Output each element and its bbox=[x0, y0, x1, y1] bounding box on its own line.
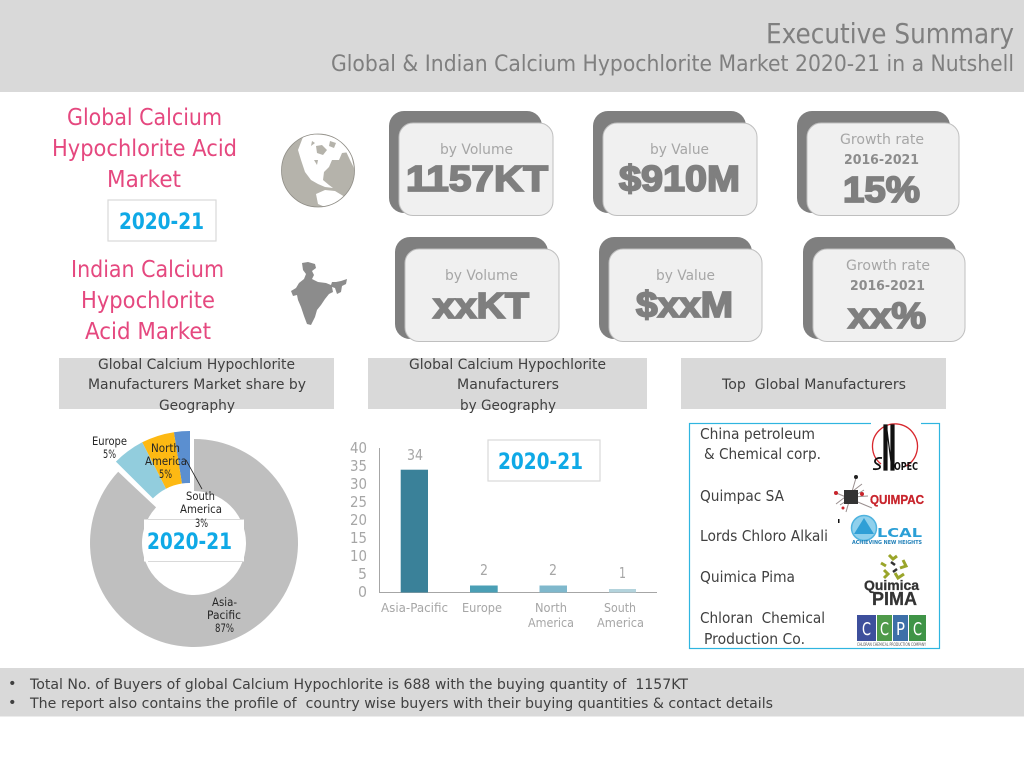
bar: Europe: 2 bbox=[480, 561, 488, 579]
stat card: india growth: Growth rate bbox=[846, 258, 930, 274]
y axis labels: 30 bbox=[350, 475, 367, 493]
heading: indian market: Hypochlorite bbox=[81, 286, 215, 314]
y axis labels: 15 bbox=[350, 529, 367, 547]
year badge: bar chart bbox=[488, 440, 600, 481]
year badge: global: 2020-21 bbox=[119, 210, 204, 235]
stat card: global value: by Value bbox=[650, 142, 709, 158]
footer bullet 2: The report also contains the profile of country wise buyers with their buying quantities & contact details bbox=[29, 696, 773, 712]
logo: LCAL: LCAL bbox=[877, 526, 922, 540]
section banner: market share bbox=[59, 357, 334, 414]
panel: top manufacturers bbox=[690, 421, 940, 648]
bar: South America: 1 bbox=[619, 564, 626, 582]
heading: global market: Market bbox=[107, 165, 181, 193]
footer bullet 1: Total No. of Buyers of global Calcium Hypochlorite is 688 with the buying quantity of 1157KT bbox=[29, 677, 688, 693]
y axis labels: 10 bbox=[350, 547, 367, 565]
section banner: manufacturers by geography bbox=[368, 357, 647, 414]
footer bullet 2: • bbox=[8, 695, 17, 711]
label: Europe bbox=[92, 434, 127, 461]
leader line bbox=[186, 460, 202, 489]
icon: india map bbox=[291, 262, 347, 325]
y axis labels: 5 bbox=[358, 565, 367, 583]
logo: CCPC: C bbox=[880, 619, 889, 640]
logo: CCPC: CHLORAN CHEMICAL PRODUCTION COMPANY bbox=[857, 642, 926, 647]
company names: Production Co. bbox=[704, 630, 805, 648]
bar: Asia-Pacific: 34 bbox=[407, 446, 423, 464]
y axis labels: 20 bbox=[350, 511, 367, 529]
category labels: Europe bbox=[462, 600, 502, 615]
company names: Chloran Chemical bbox=[700, 609, 825, 627]
logo: CCPC bbox=[857, 615, 926, 647]
slice: Europe bbox=[116, 442, 166, 498]
section banner: market share: Manufacturers Market share by bbox=[88, 377, 306, 393]
section banner: top manufacturers bbox=[681, 358, 946, 409]
logo: LCAL: ACHIEVING NEW HEIGHTS bbox=[852, 540, 922, 546]
label: South America: 3% bbox=[195, 516, 208, 530]
footer band bbox=[0, 668, 1024, 716]
stat card: india volume bbox=[395, 237, 559, 342]
stat card: global volume: 1157KT bbox=[406, 158, 548, 199]
logo: Sinopec bbox=[872, 424, 918, 473]
company names: Lords Chloro Alkali bbox=[700, 527, 828, 545]
logo: Quimica Pima: PIMA bbox=[872, 589, 917, 609]
icon: globe bbox=[282, 134, 354, 207]
logo: Quimica Pima: Quimica bbox=[864, 577, 919, 593]
section banner: market share: Geography bbox=[159, 398, 235, 414]
heading: indian market: Indian Calcium bbox=[71, 255, 224, 283]
section banner: top manufacturers: Top Global Manufacturers bbox=[721, 377, 906, 393]
year badge: global bbox=[108, 200, 216, 241]
y axis labels: 35 bbox=[350, 457, 367, 475]
year badge: donut: 2020-21 bbox=[147, 530, 232, 555]
stat card: global growth: Growth rate bbox=[840, 132, 924, 148]
heading: indian market: Acid Market bbox=[85, 317, 211, 345]
company names bbox=[700, 425, 828, 648]
category labels bbox=[381, 600, 644, 630]
logo: Quimica Pima bbox=[864, 555, 919, 609]
bar: Asia-Pacific bbox=[401, 446, 428, 592]
stat card: india value: by Value bbox=[656, 268, 715, 284]
slice: Asia-Pacific bbox=[90, 439, 298, 647]
year badge: donut bbox=[144, 520, 244, 562]
heading: indian market bbox=[71, 255, 224, 345]
y axis labels: 0 bbox=[358, 583, 367, 601]
stat card: india volume: by Volume bbox=[445, 268, 518, 284]
section banner: market share: Global Calcium Hypochlorite bbox=[98, 357, 295, 373]
stat card: global volume bbox=[389, 111, 553, 216]
label: South America bbox=[180, 489, 222, 530]
label: North America: America bbox=[145, 454, 187, 468]
footer bullet 1: • bbox=[8, 676, 17, 692]
stat card: india growth bbox=[803, 237, 965, 342]
label: Asia-Pacific bbox=[207, 595, 241, 635]
stat card: india value: $xxM bbox=[636, 284, 733, 325]
year badge: bar chart: 2020-21 bbox=[498, 450, 583, 475]
stat card: india growth: xx% bbox=[848, 295, 926, 336]
stat card: global value: $910M bbox=[619, 158, 740, 199]
stat card: india value bbox=[599, 237, 762, 342]
company names: & Chemical corp. bbox=[704, 445, 821, 463]
stat card: global value bbox=[593, 111, 757, 216]
label: North America: 5% bbox=[159, 467, 172, 481]
category labels: America bbox=[528, 615, 574, 630]
stat card: global growth: 2016-2021 bbox=[844, 152, 919, 168]
stat card: global growth bbox=[797, 111, 959, 216]
company names: China petroleum bbox=[700, 425, 815, 443]
section banner: manufacturers by geography: by Geography bbox=[460, 398, 556, 414]
logo: CCPC: C bbox=[862, 619, 871, 640]
label: Europe: 5% bbox=[103, 447, 116, 461]
logo: Quimpac bbox=[834, 475, 924, 512]
logo: LCAL bbox=[838, 516, 922, 546]
label: North America bbox=[145, 441, 187, 481]
company names: Quimica Pima bbox=[700, 568, 795, 586]
stat card: global volume: by Volume bbox=[440, 142, 513, 158]
heading: global market: Hypochlorite Acid bbox=[52, 134, 237, 162]
label: Asia-Pacific: 87% bbox=[215, 621, 234, 635]
bar chart bbox=[350, 439, 657, 630]
bar: North America: 2 bbox=[549, 561, 557, 579]
category labels: South bbox=[604, 600, 636, 615]
bar: North America bbox=[540, 561, 567, 592]
section banner: manufacturers by geography: Manufacturers bbox=[457, 377, 559, 393]
label: Asia-Pacific: Asia- bbox=[212, 595, 237, 609]
label: South America: America bbox=[180, 502, 222, 516]
bar: Europe bbox=[470, 561, 498, 592]
y axis labels bbox=[350, 439, 367, 601]
label: North America: North bbox=[151, 441, 180, 455]
stat card: india growth: 2016-2021 bbox=[850, 278, 925, 294]
stat card: india volume: xxKT bbox=[433, 285, 529, 326]
heading: global market: Global Calcium bbox=[67, 103, 222, 131]
stat card: global growth: 15% bbox=[843, 169, 920, 210]
logo: Sinopec: OPEC bbox=[894, 460, 918, 473]
donut chart bbox=[90, 431, 298, 647]
logo: CCPC: P bbox=[896, 619, 905, 640]
label: Asia-Pacific: Pacific bbox=[207, 608, 241, 622]
company names: Quimpac SA bbox=[700, 487, 785, 505]
heading: global market bbox=[52, 103, 237, 193]
category labels: North bbox=[535, 600, 567, 615]
category labels: Asia-Pacific bbox=[381, 600, 448, 615]
label: Europe: Europe bbox=[92, 434, 127, 448]
category labels: America bbox=[597, 615, 644, 630]
y axis labels: 25 bbox=[350, 493, 367, 511]
slice: South America bbox=[174, 431, 190, 484]
y axis labels: 40 bbox=[350, 439, 367, 457]
slice: North America bbox=[142, 432, 182, 489]
section banner: manufacturers by geography: Global Calcium Hypochlorite bbox=[409, 357, 606, 373]
logo: CCPC: C bbox=[913, 619, 922, 640]
bar: South America bbox=[609, 564, 636, 592]
logo: Quimpac: QUIMPAC bbox=[870, 493, 924, 507]
label: South America: South bbox=[186, 489, 215, 503]
header band bbox=[0, 0, 1024, 92]
